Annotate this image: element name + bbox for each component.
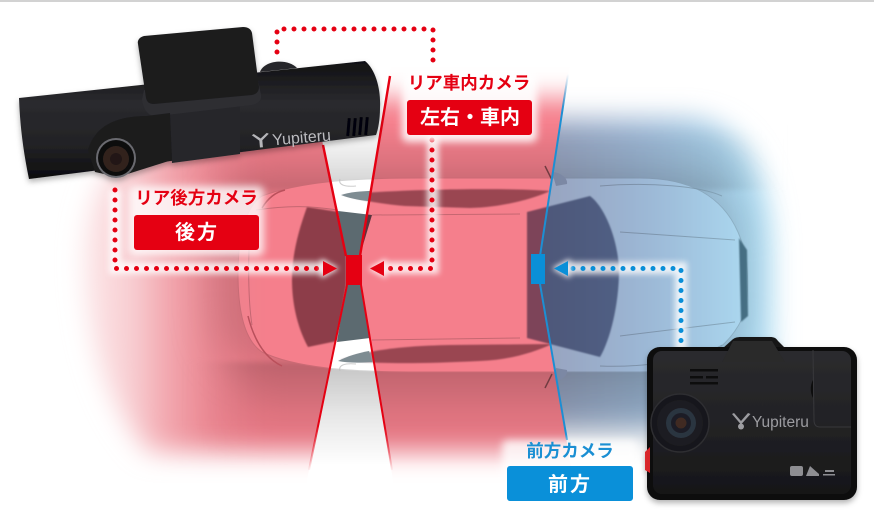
rear coverage lines bbox=[309, 76, 392, 470]
rear camera bracket bbox=[170, 106, 240, 163]
label box: rear bbox=[134, 215, 259, 250]
label heading: front camera: 前方カメラ bbox=[526, 441, 614, 461]
label: front camera bbox=[502, 440, 638, 506]
front camera logo bbox=[732, 413, 809, 431]
red area left of rear lines bbox=[78, 142, 346, 470]
label: interior camera bbox=[402, 72, 537, 142]
rear camera mount plate bbox=[138, 27, 261, 116]
front camera flap bbox=[813, 350, 851, 427]
rear window visible between lines bbox=[337, 211, 372, 342]
front camera device bbox=[645, 337, 857, 500]
label heading: interior camera: リア車内カメラ bbox=[408, 73, 530, 93]
front camera flap notch bbox=[811, 380, 813, 398]
front camera mount face bbox=[722, 341, 785, 362]
car illustration bbox=[238, 166, 748, 388]
rear camera vents bbox=[346, 117, 369, 136]
red coverage area bbox=[85, 80, 600, 452]
front camera lens bbox=[651, 394, 709, 452]
lower side window between lines bbox=[338, 351, 372, 363]
side mirrors bbox=[545, 166, 567, 388]
upper side window bbox=[343, 189, 550, 208]
red dotted connector: rear camera bbox=[115, 190, 339, 278]
windshield bbox=[527, 196, 619, 357]
rear camera ball joint bbox=[260, 62, 297, 72]
front camera logo: Yupiteru bbox=[752, 414, 809, 431]
front camera mount bbox=[718, 337, 790, 358]
front camera body bbox=[647, 347, 857, 500]
blue coverage area bbox=[500, 118, 772, 430]
rear camera lens bbox=[88, 113, 172, 178]
red dotted connector: interior camera bbox=[277, 29, 433, 278]
red area right of rear lines bbox=[361, 80, 569, 470]
front marker bbox=[531, 254, 545, 284]
label text: front: 前方 bbox=[548, 473, 592, 496]
car panel lines bbox=[249, 179, 735, 371]
label: rear camera bbox=[129, 186, 264, 256]
label box: left right interior bbox=[407, 100, 532, 135]
front camera speaker bbox=[690, 369, 718, 384]
front camera red button bbox=[645, 447, 650, 473]
rear camera logo: Yupiteru bbox=[272, 127, 332, 149]
lower side window bbox=[340, 344, 552, 363]
rear window under red bbox=[292, 207, 346, 347]
front coverage line bbox=[540, 74, 568, 440]
blue dotted connector: front camera bbox=[552, 259, 681, 395]
rear camera barrel bbox=[19, 61, 380, 179]
front camera badges bbox=[790, 466, 835, 476]
label text: left right interior: 左右・車内 bbox=[420, 106, 520, 129]
rear marker bbox=[346, 255, 362, 285]
label heading: rear camera: リア後方カメラ bbox=[135, 188, 258, 208]
rear camera device bbox=[19, 27, 380, 179]
car body bbox=[238, 178, 748, 372]
rear camera logo bbox=[252, 127, 332, 151]
rear corner lamps bbox=[248, 190, 285, 366]
label text: rear: 後方 bbox=[175, 221, 219, 244]
car shadow bbox=[215, 125, 745, 465]
label box: front bbox=[507, 466, 633, 501]
front lamp strip bbox=[739, 238, 748, 322]
upper side window between lines bbox=[341, 191, 372, 201]
